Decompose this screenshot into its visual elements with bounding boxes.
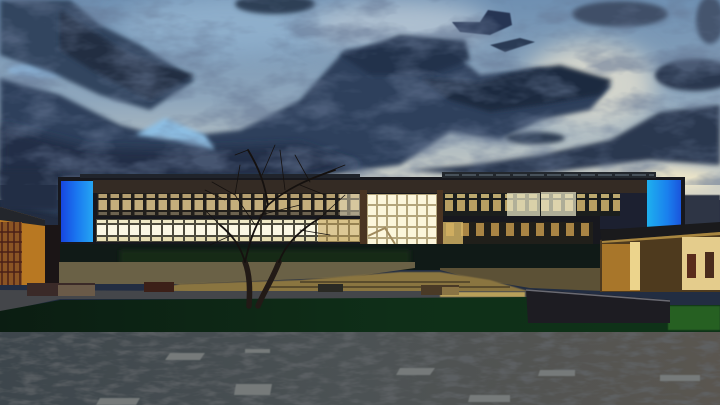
lower window row right xyxy=(443,222,593,244)
main building xyxy=(58,172,685,246)
lit blue patch in clouds xyxy=(135,118,215,150)
upper window row right xyxy=(443,192,620,216)
bench left xyxy=(27,283,95,296)
roof solar frames xyxy=(80,172,656,178)
large dark planter xyxy=(526,289,670,323)
storm clouds xyxy=(0,0,720,225)
benches xyxy=(27,282,670,323)
left small building xyxy=(0,207,45,285)
stepped stone terrace xyxy=(130,272,535,294)
blue left panel xyxy=(61,181,93,242)
building facade shell xyxy=(58,177,685,245)
footpath xyxy=(0,290,530,312)
blue right panel xyxy=(647,180,681,230)
retaining wall right xyxy=(440,268,602,291)
cloud texture xyxy=(0,0,720,185)
bench centre xyxy=(144,282,174,292)
stone pavement xyxy=(0,332,720,405)
hedge and retaining walls xyxy=(45,225,602,291)
sky background xyxy=(0,0,720,200)
bare tree xyxy=(205,145,345,306)
lit strip on path xyxy=(440,292,525,297)
right small building xyxy=(600,222,720,292)
lawn xyxy=(0,297,720,332)
warm windows right end of left wing xyxy=(318,194,360,242)
central atrium xyxy=(360,190,443,246)
beige retaining wall left xyxy=(59,262,415,284)
lower window row left xyxy=(96,219,360,242)
dark end section xyxy=(600,193,647,229)
upper window row left xyxy=(97,193,360,216)
bench right of tree xyxy=(421,285,459,295)
small planter xyxy=(318,284,343,292)
bright lawn patch xyxy=(668,306,720,330)
